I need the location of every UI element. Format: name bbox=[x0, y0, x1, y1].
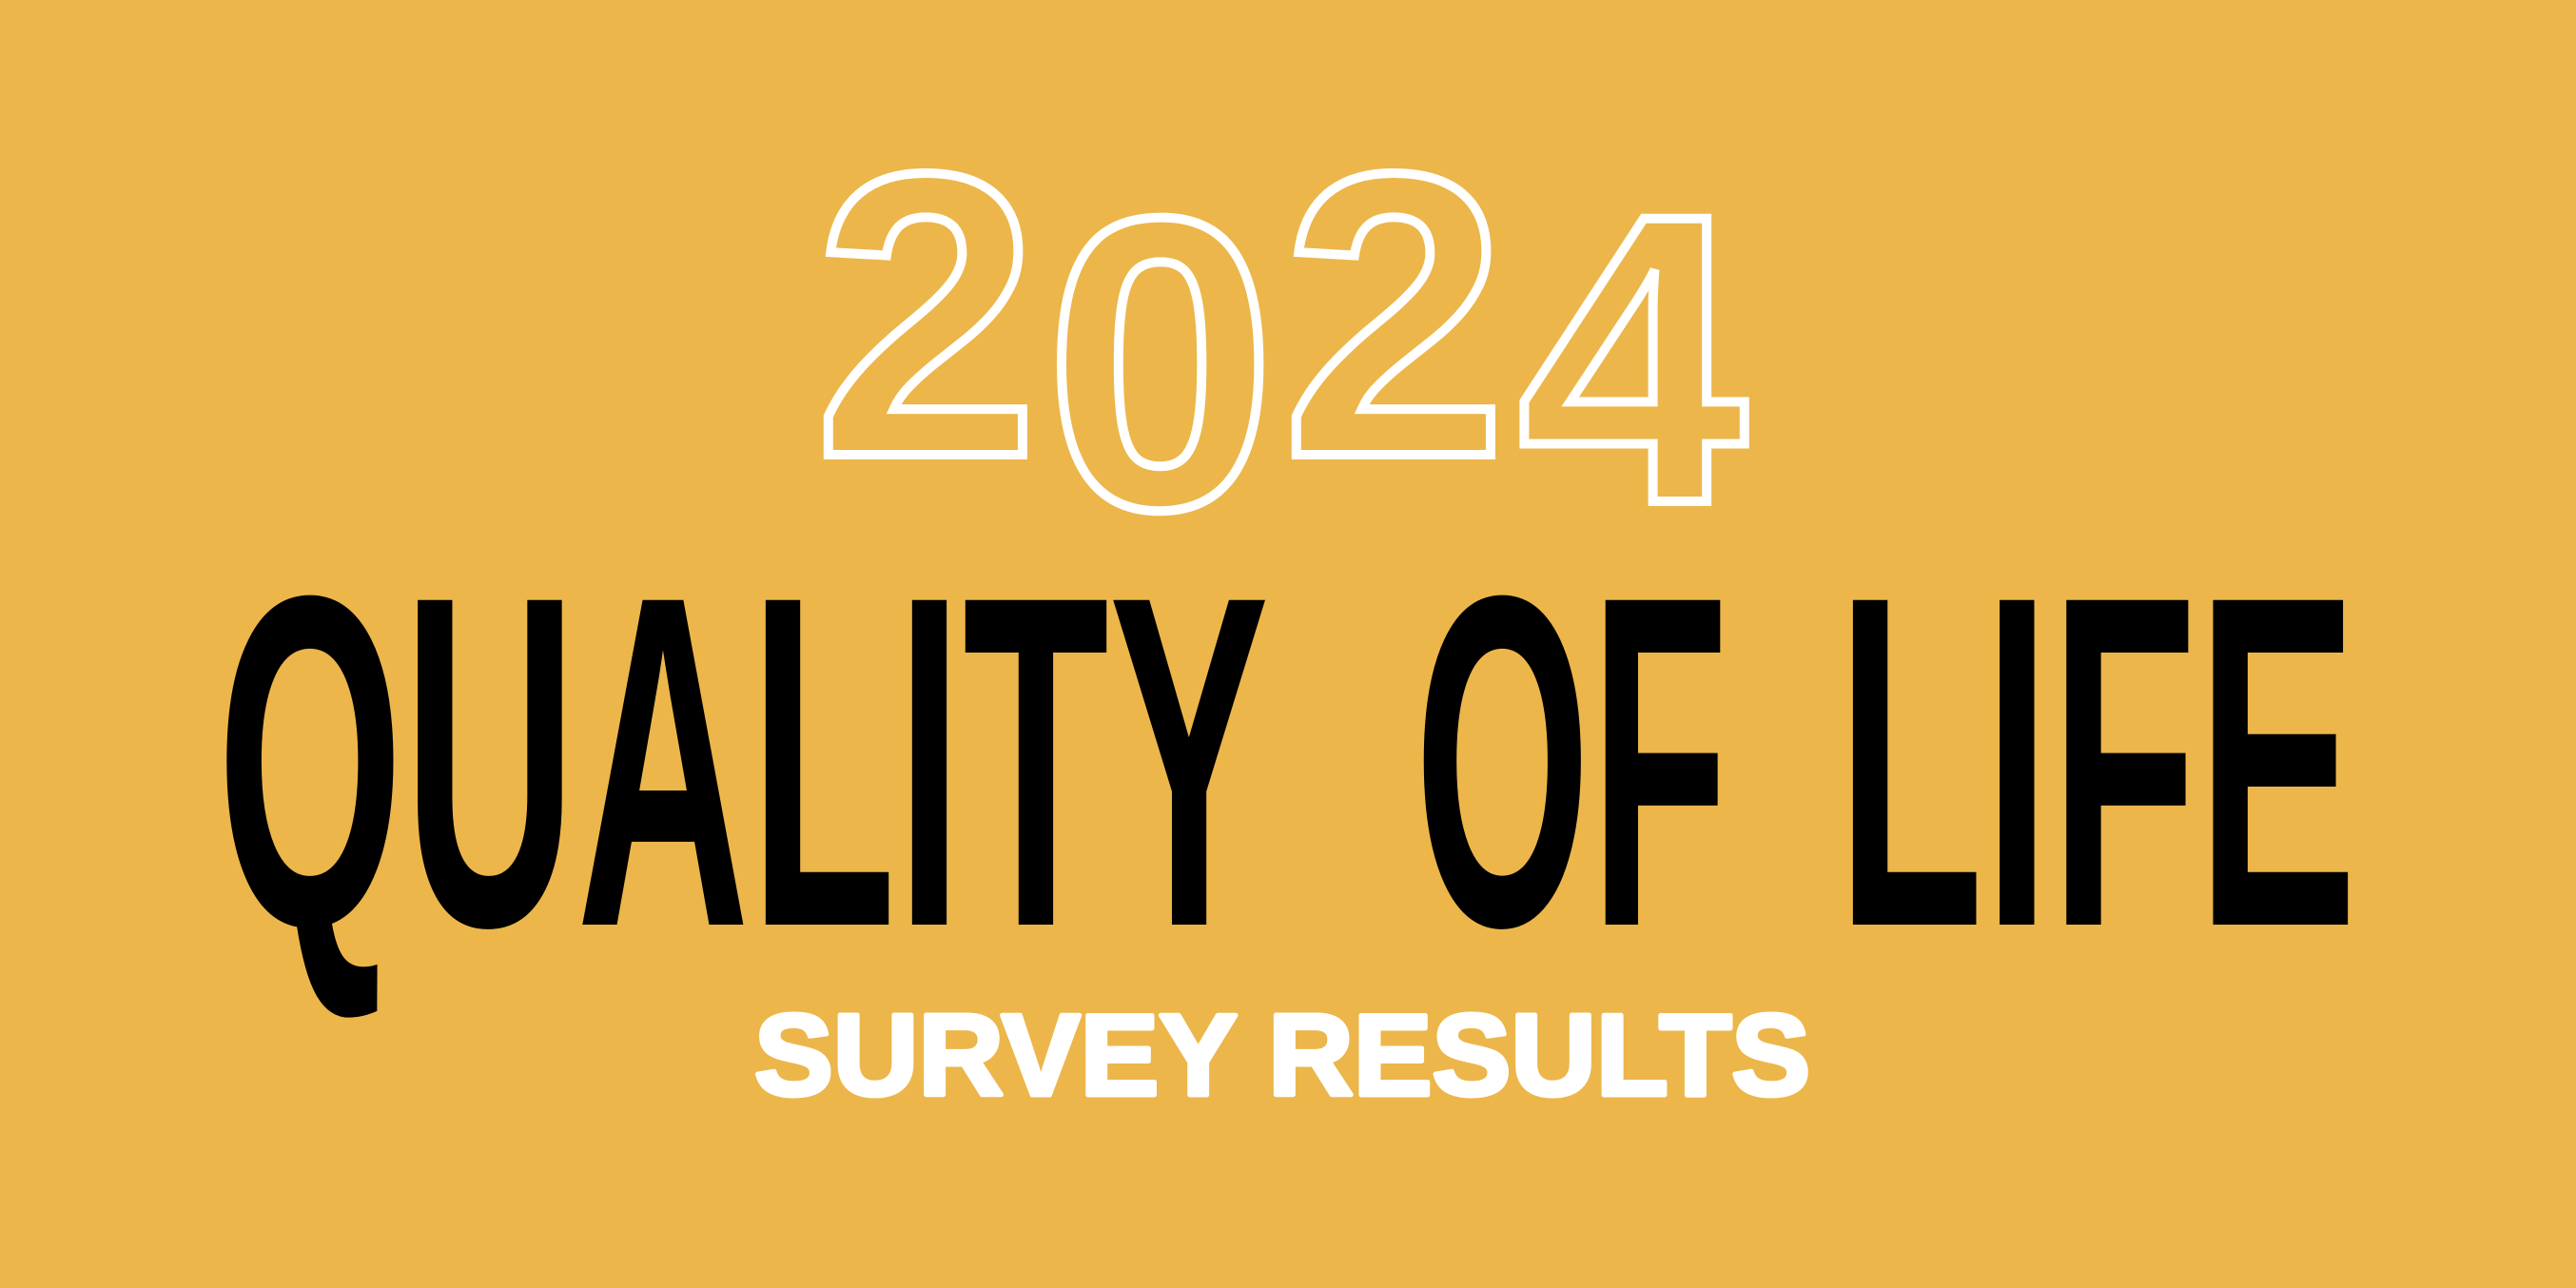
title: QUALITY OF LIFE: OF bbox=[1415, 498, 1728, 1025]
subtitle: SURVEY RESULTS: SURVEY RESULTS bbox=[754, 990, 1810, 1120]
year: outlined 2024: 2 bbox=[814, 89, 1039, 540]
year: outlined 2024: 4 bbox=[1518, 129, 1749, 589]
title: QUALITY OF LIFE: QUALITY bbox=[217, 498, 1269, 1025]
year: outlined 2024: 0 bbox=[1045, 132, 1276, 595]
year: outlined 2024 bbox=[814, 89, 1749, 595]
year: outlined 2024: 2 bbox=[1282, 89, 1507, 540]
